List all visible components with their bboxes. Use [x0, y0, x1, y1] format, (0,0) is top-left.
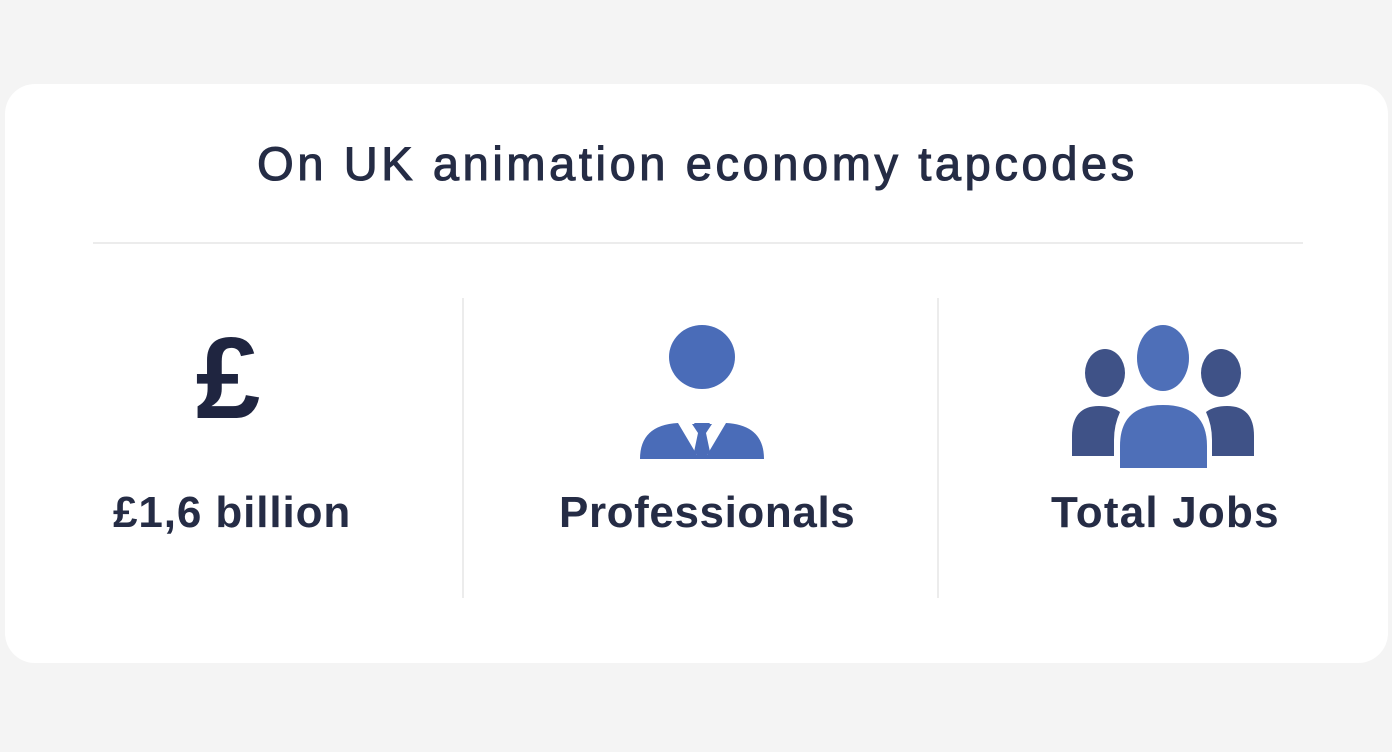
- icon: pound sign: £: [196, 313, 260, 443]
- label: Professionals: Professionals: [559, 488, 855, 537]
- icon: professional: [640, 325, 764, 459]
- icon: group: [1072, 325, 1254, 468]
- title: On UK animation economy tapcodes: [257, 137, 1138, 190]
- label: Total Jobs: Total Jobs: [1051, 488, 1280, 537]
- card: [5, 84, 1388, 663]
- label: £1,6 billion: £1,6 billion: [113, 488, 351, 537]
